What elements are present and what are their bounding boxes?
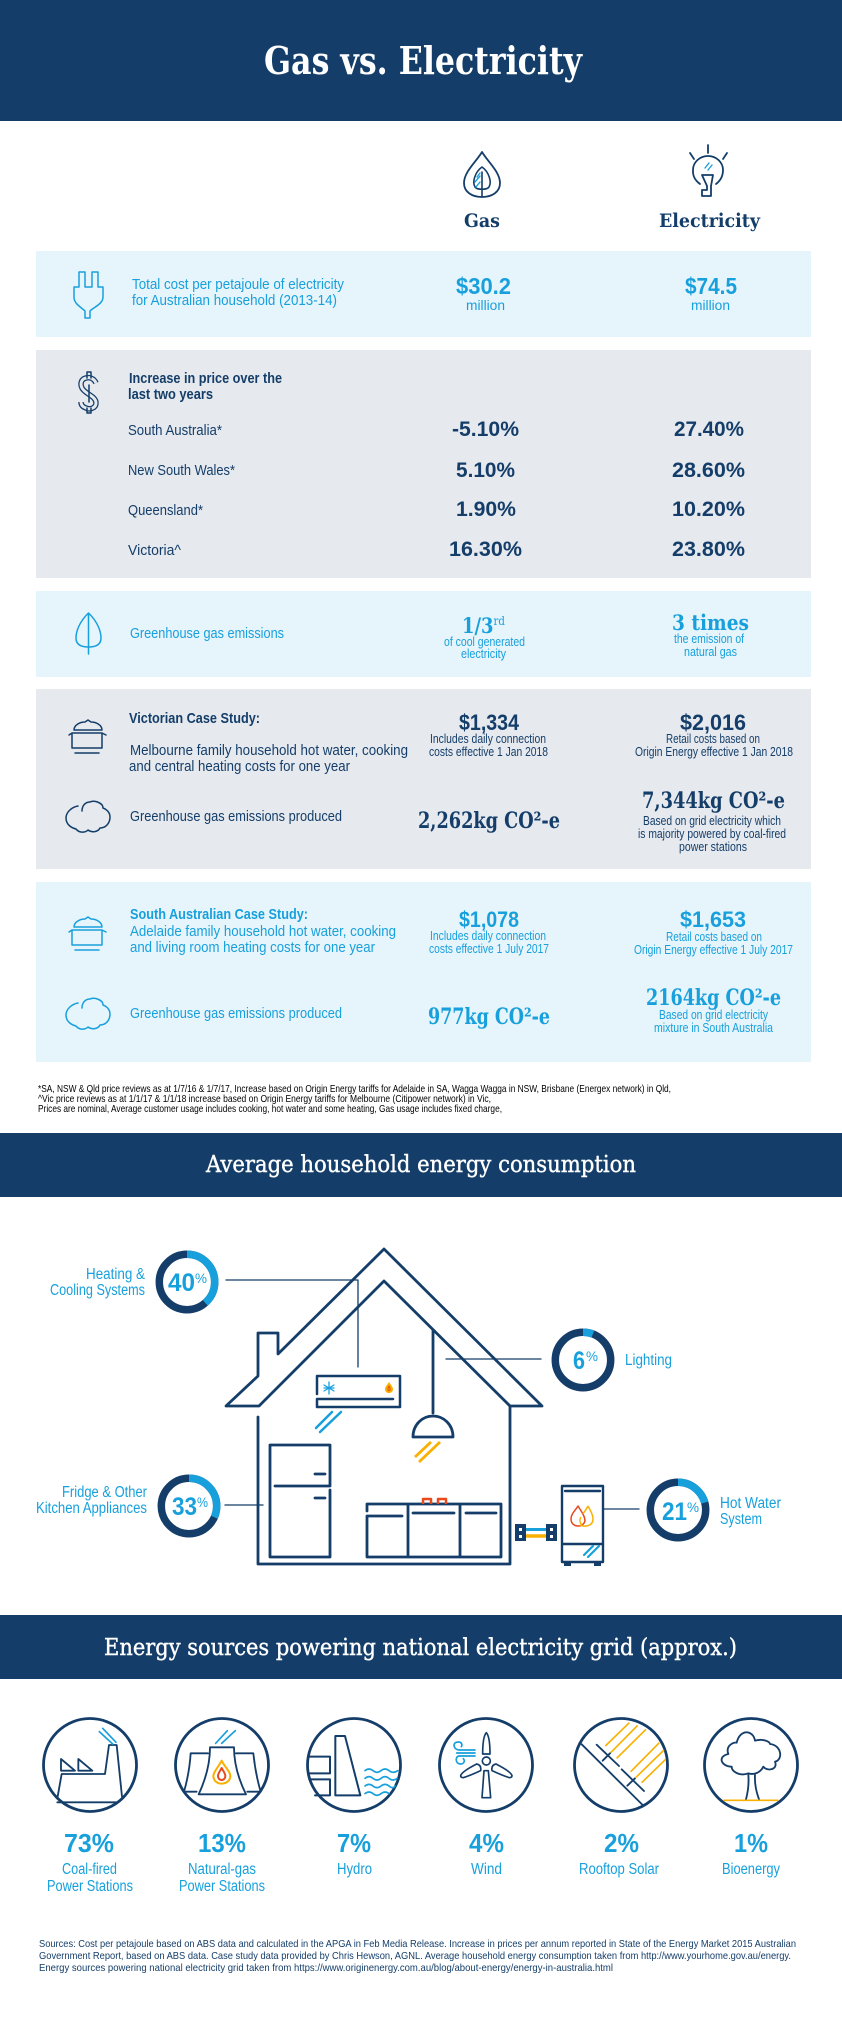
value: Victorian gas emissions: 2,262kg CO²-e xyxy=(418,808,560,834)
text: Victorian case study description xyxy=(129,710,408,775)
air conditioner xyxy=(316,1376,400,1432)
stat: coal-fired: 73% xyxy=(64,1828,114,1858)
icon: plug xyxy=(74,272,103,318)
row: New South Wales: 28.60% xyxy=(672,459,745,482)
ceiling lamp xyxy=(413,1330,453,1462)
donut: lighting 6% xyxy=(555,1332,611,1388)
value: Victorian electricity cost xyxy=(635,710,793,759)
value: three times: 3 times xyxy=(672,610,749,635)
donut: heating and cooling 40%: % xyxy=(195,1270,207,1286)
label: fridge and kitchen appliances xyxy=(36,1484,147,1517)
hot water pipes xyxy=(515,1524,557,1541)
value: Victorian electricity emissions: 7,344kg CO²-e xyxy=(642,788,785,814)
stat: bioenergy: 1% xyxy=(734,1828,768,1858)
value: South Australian electricity cost xyxy=(634,907,793,957)
row: South Australia: South Australia* xyxy=(128,422,222,439)
row: Queensland: 10.20% xyxy=(672,498,745,521)
text: total cost description: Total cost per petajoule of electricity xyxy=(132,276,344,293)
value: Victorian electricity emissions: Based on grid electricity which xyxy=(643,813,781,828)
value: South Australian electricity emissions: mixture in South Australia xyxy=(654,1020,774,1035)
value: gas cost xyxy=(456,273,511,313)
roof and chimney xyxy=(226,1249,542,1406)
value: South Australian gas cost xyxy=(429,907,549,956)
row: Victoria: Victoria^ xyxy=(128,542,181,559)
house walls xyxy=(258,1406,510,1564)
value: Victorian electricity emissions xyxy=(638,788,786,854)
icon: coal-fired power station xyxy=(44,1718,136,1812)
row: Victoria: 23.80% xyxy=(672,538,745,561)
stat: coal-fired: Power Stations xyxy=(47,1878,133,1895)
stat: bioenergy xyxy=(722,1828,780,1878)
icon: snowflake xyxy=(324,1382,334,1394)
leader line: heating xyxy=(226,1280,358,1367)
row: Queensland: 1.90% xyxy=(456,498,516,521)
heading: increase in price xyxy=(128,370,282,403)
panel: greenhouse gas emissions xyxy=(36,591,811,677)
value: Victorian gas cost: costs effective 1 Jan 2018 xyxy=(429,744,548,759)
value: Victorian electricity emissions: is majority powered by coal-fired xyxy=(638,826,786,841)
donut: fridge 33%: % xyxy=(197,1494,208,1510)
stat: hydro xyxy=(337,1828,372,1878)
value: South Australian electricity cost: Origin Energy effective 1 July 2017 xyxy=(634,942,793,957)
row: Victoria: 16.30% xyxy=(449,538,522,561)
value: South Australian electricity emissions xyxy=(646,985,781,1035)
stat: rooftop solar xyxy=(579,1828,659,1878)
icon: bioenergy tree xyxy=(704,1718,798,1812)
value: South Australian gas cost: Includes daily connection xyxy=(430,928,546,943)
value: South Australian gas emissions: 977kg CO²-e xyxy=(428,1004,550,1030)
stat: wind: 4% xyxy=(469,1828,504,1858)
icon: gas flame xyxy=(464,152,500,197)
icon: cloud xyxy=(66,801,110,832)
footnote: ^Vic price reviews as at 1/1/17 & 1/1/18 increase based on Origin Energy tariffs for Melbourne (Citipower network) in Vic, xyxy=(38,1093,491,1105)
label: heating and cooling: Cooling Systems xyxy=(50,1282,145,1299)
value: South Australian electricity cost: Retail costs based on xyxy=(666,929,762,944)
donut: hot water 21% xyxy=(650,1482,706,1538)
value: one third: rd xyxy=(494,614,505,628)
stat: coal-fired xyxy=(47,1828,133,1895)
heading: increase in price: Increase in price over the xyxy=(129,370,282,387)
value: gas cost: million xyxy=(466,297,505,313)
label: lighting: Lighting xyxy=(625,1352,672,1369)
icon: cloud xyxy=(66,998,110,1029)
value: South Australian electricity cost: $1,653 xyxy=(680,907,746,932)
value: Victorian gas cost xyxy=(429,710,548,759)
stat: natural-gas xyxy=(179,1828,265,1895)
stat: rooftop solar: 2% xyxy=(604,1828,639,1858)
leader line: lighting xyxy=(446,1358,541,1360)
value: one third xyxy=(444,613,525,661)
icon: rooftop solar xyxy=(574,1718,668,1812)
row: Queensland: Queensland* xyxy=(128,502,203,519)
title: Gas vs. Electricity xyxy=(264,38,583,83)
value: electricity cost: $74.5 xyxy=(685,273,737,299)
value: three times: natural gas xyxy=(684,644,737,659)
row: New South Wales: New South Wales* xyxy=(128,462,235,479)
value: South Australian gas cost: $1,078 xyxy=(459,907,519,932)
label: electricity: Electricity xyxy=(659,210,761,232)
value: Victorian electricity cost: $2,016 xyxy=(680,710,746,735)
kitchen cabinets xyxy=(367,1499,501,1557)
row: New South Wales xyxy=(128,459,745,482)
footnote xyxy=(38,1083,671,1115)
donut: lighting 6%: 6 xyxy=(573,1347,585,1375)
icon: hydro dam xyxy=(308,1718,400,1812)
value: electricity cost: million xyxy=(691,297,730,313)
value: Victorian electricity cost: Origin Energy effective 1 Jan 2018 xyxy=(635,744,793,759)
icon: cooking pot xyxy=(69,720,106,753)
heading: increase in price: last two years xyxy=(128,386,213,403)
icon: leaf xyxy=(76,613,101,654)
section heading: energy sources xyxy=(0,1615,842,1679)
row: Victoria xyxy=(128,538,745,561)
footnote: *SA, NSW & Qld price reviews as at 1/7/16 & 1/7/17, Increase based on Origin Energy tariffs for Adelaide in SA, Wagga Wagga in NSW, Brisbane (Energex network) in Qld, xyxy=(38,1083,671,1095)
donut: heating and cooling 40%: 40 xyxy=(168,1269,195,1297)
text: Victorian case study description: and central heating costs for one year xyxy=(129,758,350,775)
text: South Australian case study description: and living room heating costs for one year xyxy=(130,939,375,956)
stove burners xyxy=(423,1499,446,1504)
icon: cooking pot xyxy=(69,917,106,950)
leader line: hot water xyxy=(603,1508,639,1510)
stat: wind xyxy=(469,1828,504,1878)
row: South Australia: -5.10% xyxy=(452,418,519,441)
icon: flame xyxy=(385,1382,393,1393)
label: fridge and kitchen appliances: Fridge & Other xyxy=(62,1484,147,1501)
value: South Australian electricity emissions: Based on grid electricity xyxy=(659,1007,768,1022)
column heading: electricity xyxy=(659,145,761,232)
value: Victorian gas cost: Includes daily connection xyxy=(430,731,546,746)
sources text xyxy=(39,1938,796,1974)
label: hot water system: System xyxy=(720,1511,762,1528)
value: three times: the emission of xyxy=(674,631,744,646)
icon: light bulb xyxy=(690,145,727,196)
text: Victorian case study description: Victorian Case Study: xyxy=(129,710,260,727)
label: hot water system: Hot Water xyxy=(720,1495,781,1512)
stat: hydro: 7% xyxy=(337,1828,371,1858)
house illustration xyxy=(226,1249,603,1566)
header banner xyxy=(0,0,842,121)
panel: South Australian case study xyxy=(36,882,811,1062)
hot water unit xyxy=(562,1486,603,1566)
value: gas cost: $30.2 xyxy=(456,273,511,299)
fridge xyxy=(270,1445,330,1557)
text: total cost description: for Australian household (2013-14) xyxy=(132,292,337,309)
panel: price increase xyxy=(36,350,811,578)
footnote: Prices are nominal, Average customer usage includes cooking, hot water and some heating, Gas usage includes fixed charge, xyxy=(38,1103,502,1115)
stat: rooftop solar: Rooftop Solar xyxy=(579,1861,659,1878)
value: Victorian gas cost: $1,334 xyxy=(459,710,520,735)
row: South Australia xyxy=(128,418,744,441)
value: electricity cost xyxy=(685,273,737,313)
donut: lighting 6%: % xyxy=(586,1348,598,1364)
row: Queensland xyxy=(128,498,745,521)
text: Victorian case study description: Melbourne family household hot water, cooking xyxy=(130,742,408,759)
label: heating and cooling: Heating & xyxy=(86,1266,146,1283)
text: South Australian case study description: South Australian Case Study: xyxy=(130,906,308,923)
text: total cost description xyxy=(132,276,344,309)
label: heating and cooling xyxy=(50,1266,146,1299)
stat: wind: Wind xyxy=(471,1861,502,1878)
value: one third: of cool generated xyxy=(444,634,525,649)
icon: dollar sign xyxy=(81,372,96,413)
row: South Australia: 27.40% xyxy=(674,418,744,441)
stat: natural-gas: Power Stations xyxy=(179,1878,265,1895)
label: greenhouse gas emissions: Greenhouse gas emissions xyxy=(130,625,284,642)
section heading: average household energy consumption xyxy=(0,1133,842,1197)
label: South Australian emissions: Greenhouse gas emissions produced xyxy=(130,1005,342,1022)
row: New South Wales: 5.10% xyxy=(456,459,515,482)
icon: wind turbine xyxy=(440,1718,532,1812)
value: one third: electricity xyxy=(461,646,506,661)
panel: Victorian case study xyxy=(36,689,811,869)
section heading: energy sources: Energy sources powering national electricity grid (approx.) xyxy=(104,1635,737,1661)
value: South Australian gas cost: costs effective 1 July 2017 xyxy=(429,941,549,956)
text: South Australian case study description xyxy=(130,906,396,956)
donut: hot water 21%: % xyxy=(687,1499,699,1515)
value: one third: 1/3 xyxy=(462,613,499,638)
text: South Australian case study description: Adelaide family household hot water, cooking xyxy=(130,923,396,940)
leader line: fridge xyxy=(225,1504,263,1506)
donut: hot water 21%: 21 xyxy=(662,1498,687,1526)
donut: fridge 33% xyxy=(161,1478,217,1534)
icon: natural-gas power station xyxy=(176,1718,268,1812)
sources text: Energy sources powering national electricity grid taken from https://www.originenergy.com.au/blog/about-energy/energy-in-australia.html xyxy=(39,1962,613,1974)
label: fridge and kitchen appliances: Kitchen Appliances xyxy=(36,1500,147,1517)
value: South Australian electricity emissions: 2164kg CO²-e xyxy=(646,985,781,1011)
donut: fridge 33%: 33 xyxy=(172,1493,197,1521)
value: Victorian electricity emissions: power stations xyxy=(679,839,747,854)
stat: natural-gas: Natural-gas xyxy=(188,1861,256,1878)
stat: coal-fired: Coal-fired xyxy=(62,1861,117,1878)
value: Victorian electricity cost: Retail costs based on xyxy=(666,731,760,746)
value: three times xyxy=(672,610,749,659)
stat: hydro: Hydro xyxy=(337,1861,372,1878)
section heading: average household energy consumption: Average household energy consumption xyxy=(205,1152,636,1178)
column heading: gas xyxy=(464,152,500,232)
label: Victorian emissions: Greenhouse gas emissions produced xyxy=(130,808,342,825)
stat: bioenergy: Bioenergy xyxy=(722,1861,780,1878)
air rays xyxy=(316,1412,341,1432)
panel: total cost xyxy=(36,251,811,337)
label: gas: Gas xyxy=(464,210,500,232)
donut: heating and cooling 40% xyxy=(159,1254,215,1310)
stat: natural-gas: 13% xyxy=(198,1828,246,1858)
label: hot water system xyxy=(720,1495,781,1528)
